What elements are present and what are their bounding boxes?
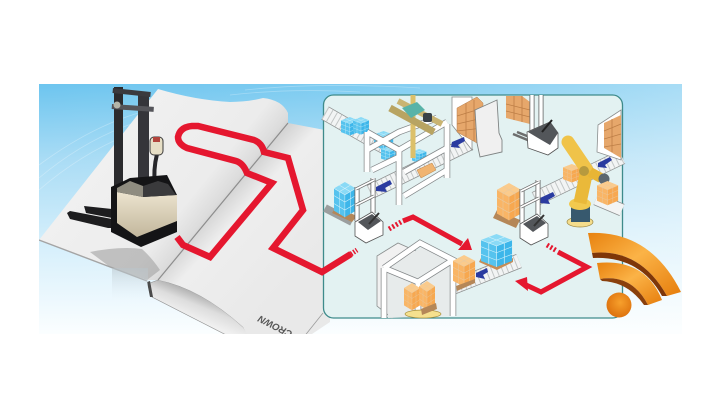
packaging gantry — [377, 243, 453, 318]
conveyor: bottom centre line — [436, 261, 519, 294]
blue direction arrow — [476, 268, 488, 279]
wifi signal icon — [588, 233, 681, 318]
left page — [39, 89, 288, 280]
bottom orange stacks — [404, 255, 475, 318]
book spine line — [158, 123, 288, 280]
outer wifi arc — [588, 233, 681, 296]
forklift forks — [67, 206, 112, 228]
inner wifi arc — [597, 262, 662, 305]
blue pallet load — [479, 234, 513, 270]
orange box at robot — [563, 164, 581, 182]
conveyor: top-left line — [325, 113, 400, 155]
orange boxes beyond robot — [597, 181, 618, 205]
book brand text: CROWN — [255, 312, 294, 339]
forklift with orange load — [493, 180, 548, 245]
page stack side — [150, 280, 246, 334]
conveyor: lower right line — [596, 199, 622, 210]
forklift handle — [150, 137, 163, 186]
forklift with blue load — [332, 178, 383, 243]
blue direction arrow — [451, 137, 465, 148]
red route across book into panel — [177, 126, 351, 272]
forklift body — [111, 175, 177, 247]
conveyor: centre line — [370, 143, 470, 192]
gantry robot beam — [390, 95, 442, 178]
book cover sliver — [147, 281, 153, 297]
wifi dot — [606, 292, 632, 318]
red arrow from right forklift — [515, 245, 587, 292]
forklift mast — [112, 87, 154, 190]
reflection below book — [112, 268, 148, 286]
red route dashed end — [351, 250, 357, 254]
orange rack with machine — [452, 97, 502, 157]
factory panel — [324, 95, 622, 318]
gantry frame — [367, 118, 447, 205]
sky background panel — [39, 84, 682, 334]
right page — [158, 123, 330, 340]
top right stacked boxes and forklift — [506, 95, 558, 155]
blue direction arrow — [376, 180, 392, 192]
conveyor under blue load — [325, 208, 352, 222]
blue boxes on top conveyor — [341, 117, 426, 163]
robot arm — [567, 142, 610, 227]
forklift reflection on the page — [90, 248, 160, 280]
right rack — [597, 110, 621, 160]
blue direction arrow — [540, 192, 555, 204]
red arrow to centre conveyor — [389, 217, 472, 250]
conveyor: right line — [535, 157, 622, 199]
blue direction arrow — [598, 157, 612, 168]
forklift stacker — [67, 87, 177, 247]
open book — [39, 89, 330, 340]
